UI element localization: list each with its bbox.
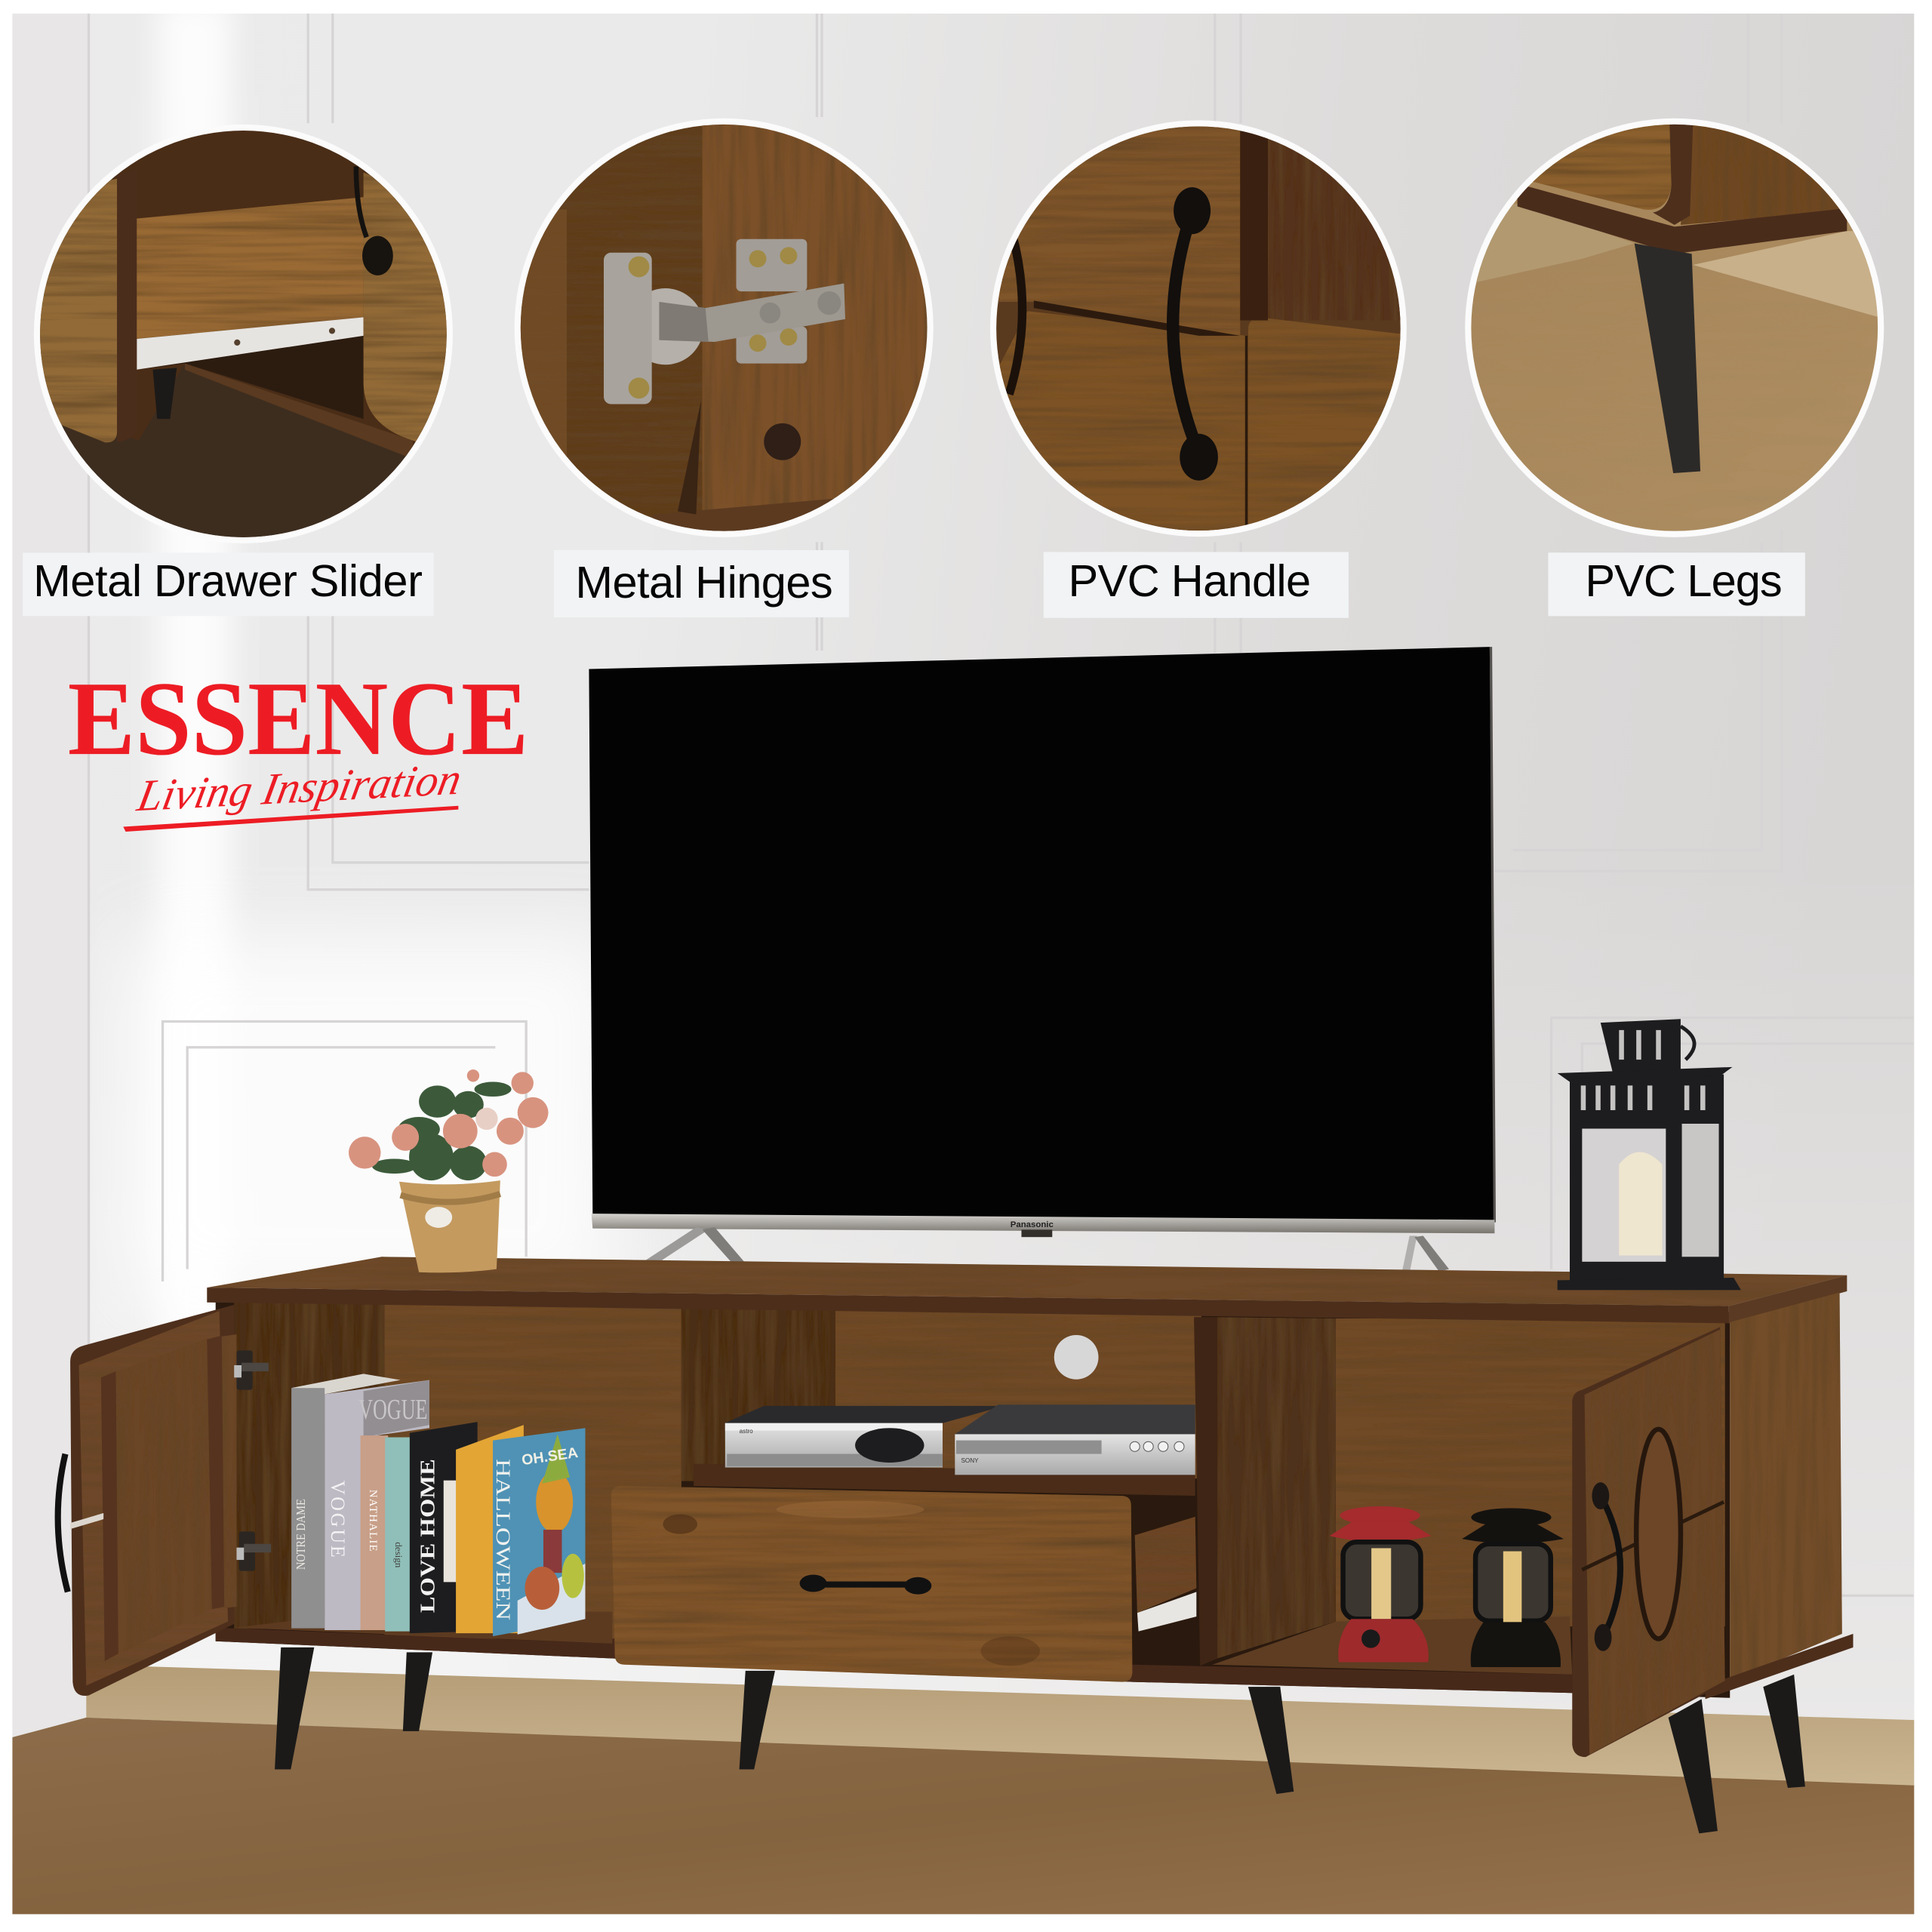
right door, open bbox=[1572, 1327, 1725, 1757]
left door, open bbox=[58, 1305, 236, 1696]
label: PVC handle bbox=[1044, 552, 1349, 618]
logo: Essence Living Inspiration: Living Inspiration bbox=[133, 754, 466, 820]
door handle bbox=[1601, 1496, 1620, 1638]
cabinet legs bbox=[275, 1647, 1805, 1833]
books: LOVE HOME bbox=[417, 1459, 440, 1613]
drawer side and slider bbox=[1135, 1517, 1196, 1632]
DVD player right: SONY bbox=[961, 1457, 979, 1464]
floor and baseboard bbox=[12, 1665, 1915, 1915]
detail circle: PVC handle bbox=[984, 117, 1416, 542]
books: design bbox=[393, 1542, 405, 1568]
DVD player right bbox=[955, 1404, 1195, 1475]
DVD player left: astro bbox=[740, 1428, 753, 1435]
books: OH.SEA bbox=[521, 1444, 579, 1469]
interior back panels bbox=[384, 1300, 1725, 1638]
books: NOTRE DAME bbox=[294, 1499, 308, 1570]
cabinet right side panel bbox=[1706, 1293, 1854, 1699]
television bbox=[589, 647, 1496, 1285]
label: PVC handle: PVC Handle bbox=[1069, 555, 1311, 606]
books: VOGUE bbox=[327, 1481, 349, 1558]
photo frame edge bbox=[0, 1915, 1932, 1932]
drawer handle bbox=[800, 1575, 931, 1595]
DVD player left bbox=[724, 1406, 1004, 1467]
logo: Essence Living Inspiration: ESSENCE bbox=[68, 660, 528, 777]
leaves bbox=[372, 1081, 512, 1180]
burlap pot bbox=[399, 1180, 500, 1272]
cabinet backing bbox=[216, 1300, 1730, 1698]
label: metal hinges bbox=[554, 550, 849, 617]
cabinet top bbox=[207, 1257, 1847, 1323]
detail circle: metal drawer slider bbox=[34, 123, 456, 549]
detail circle: metal hinges bbox=[512, 117, 937, 542]
detail circle: PVC legs bbox=[1459, 117, 1890, 542]
right divider bbox=[1217, 1317, 1336, 1659]
shelves and base strips bbox=[216, 1317, 1572, 1693]
television: Panasonic bbox=[1011, 1220, 1054, 1229]
label: PVC legs bbox=[1548, 552, 1805, 616]
flower pot bbox=[349, 1069, 549, 1272]
label: metal drawer slider: Metal Drawer Slider bbox=[33, 555, 423, 606]
TV cabinet bbox=[58, 1257, 1854, 1833]
books bbox=[291, 1374, 586, 1636]
logo: Essence Living Inspiration bbox=[68, 660, 528, 832]
open drawer front bbox=[611, 1486, 1132, 1682]
table lantern with candle bbox=[1558, 1019, 1741, 1290]
interior side panels bbox=[234, 1300, 835, 1629]
books: VOGUE bbox=[358, 1395, 428, 1426]
small black lantern bbox=[1462, 1508, 1564, 1667]
label: metal hinges: Metal Hinges bbox=[575, 557, 833, 608]
small red lantern bbox=[1330, 1506, 1431, 1662]
books: NATHALIE bbox=[367, 1490, 379, 1552]
door ellipse cut-out bbox=[1636, 1429, 1681, 1638]
door hinges bbox=[234, 1350, 271, 1571]
flowers bbox=[349, 1069, 549, 1177]
label: PVC legs: PVC Legs bbox=[1585, 555, 1783, 606]
books: HALLOWEEN bbox=[492, 1459, 514, 1620]
